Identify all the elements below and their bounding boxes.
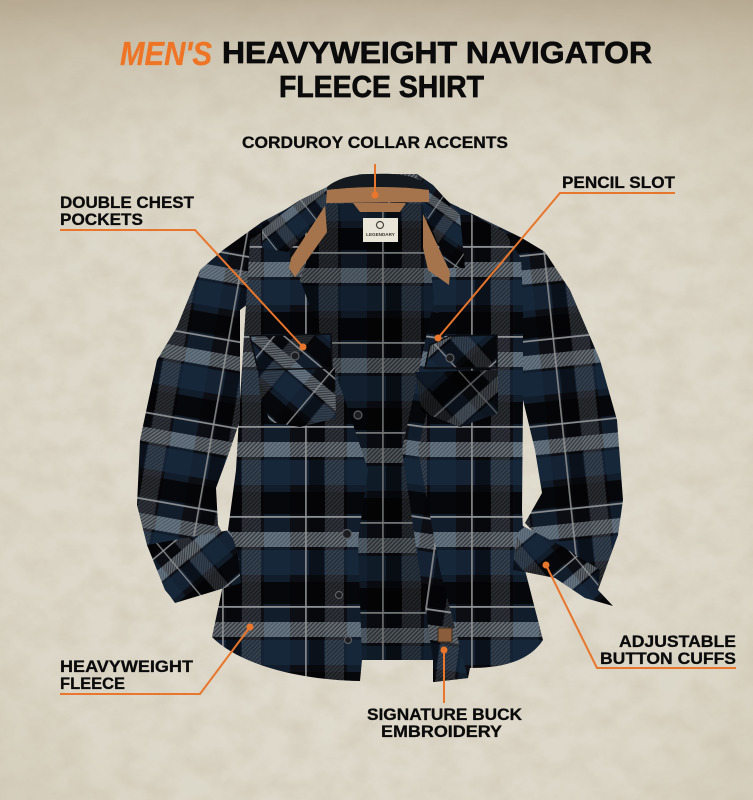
- buck embroidery patch: [438, 628, 452, 642]
- shirt interior back panel: [300, 204, 434, 660]
- label: BUTTON CUFFS: [600, 649, 736, 668]
- callout: heavyweight fleece: [60, 624, 254, 694]
- right front placket: [402, 300, 468, 682]
- label: EMBROIDERY: [381, 722, 503, 741]
- right collar: [417, 174, 465, 268]
- left cuff: [147, 530, 241, 603]
- dot: [300, 344, 306, 350]
- leader line: [60, 627, 250, 694]
- label: HEAVYWEIGHT: [60, 657, 194, 676]
- neck label tag: LEGENDARY: [366, 232, 395, 237]
- label: PENCIL SLOT: [562, 173, 676, 192]
- right pocket flap: [425, 335, 497, 368]
- right pocket: [415, 370, 498, 427]
- leader line: [60, 230, 303, 347]
- right sleeve: [520, 237, 623, 590]
- leader line: [546, 565, 736, 668]
- dot: [434, 334, 442, 342]
- shirt photo illustration: [137, 174, 623, 682]
- shoulder yoke fill: [223, 187, 330, 310]
- left corduroy lapel: [289, 206, 327, 277]
- callout: pencil slot: [434, 173, 676, 342]
- callout: signature buck embroidery: [367, 646, 523, 741]
- right shoulder yoke fill: [450, 203, 545, 320]
- label: ADJUSTABLE: [619, 632, 736, 651]
- title line 1: HEAVYWEIGHT NAVIGATOR: [222, 35, 652, 70]
- right corduroy lapel: [423, 214, 450, 285]
- buttons: [291, 352, 454, 644]
- callout: adjustable button cuffs: [542, 562, 736, 668]
- label: POCKETS: [60, 210, 143, 229]
- left front placket: [292, 280, 368, 681]
- callout: double chest pockets: [60, 193, 306, 350]
- label: FLEECE: [60, 674, 125, 693]
- right cuff: [513, 525, 613, 606]
- leader line: [438, 193, 675, 338]
- left pocket flap: [250, 334, 332, 370]
- dot: [246, 624, 254, 630]
- corduroy collar band: [326, 187, 429, 203]
- collar top plaid band: [327, 174, 430, 193]
- title line 2: FLEECE SHIRT: [279, 69, 484, 104]
- shirt body: [212, 174, 543, 682]
- label: DOUBLE CHEST: [60, 193, 195, 212]
- label: CORDUROY COLLAR ACCENTS: [242, 133, 508, 152]
- dot: [440, 646, 448, 654]
- corduroy inner loop: [353, 203, 406, 212]
- title: [120, 35, 652, 104]
- label: SIGNATURE BUCK: [367, 705, 523, 724]
- dot: [372, 192, 378, 198]
- title accent: MEN'S: MEN'S: [120, 35, 212, 72]
- left collar: [262, 187, 327, 252]
- neck label tag: [363, 218, 398, 242]
- leader line: [374, 164, 376, 195]
- leader line: [443, 650, 445, 703]
- callout: corduroy collar accents: [242, 133, 508, 198]
- interior shadow: [300, 204, 434, 660]
- dot: [542, 562, 550, 568]
- left sleeve: [137, 250, 240, 570]
- left pocket: [258, 368, 336, 427]
